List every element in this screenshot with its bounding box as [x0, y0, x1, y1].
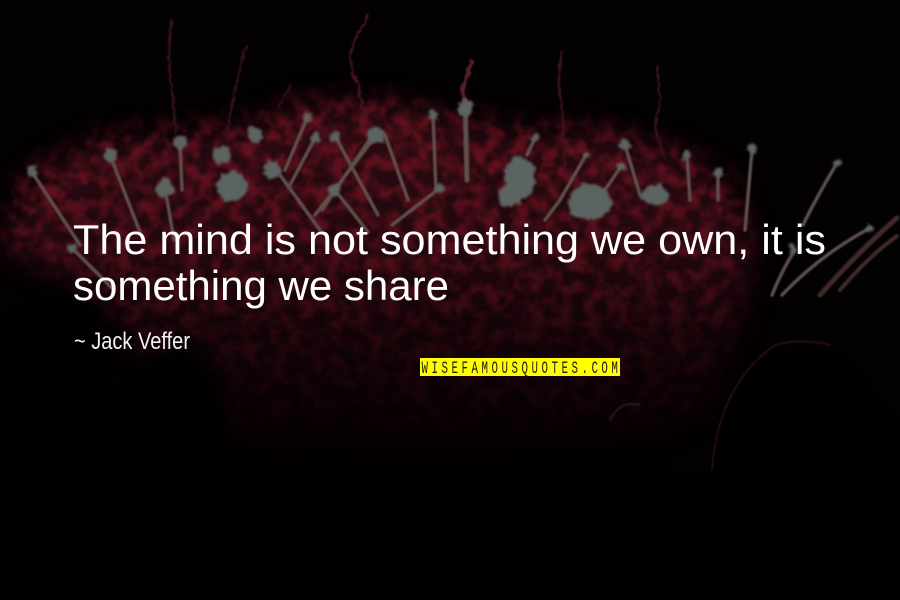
watermark badge: WISEFAMOUSQUOTES.COM	[422, 360, 621, 379]
quote line 1: The mind is not something we own, it is	[73, 216, 826, 263]
rising red trails	[169, 15, 665, 175]
silhouettes of crowd	[0, 290, 900, 600]
firework bursts	[26, 100, 874, 253]
silhouette rim highlights	[610, 342, 830, 470]
firework streaks	[32, 100, 897, 295]
author attribution: ~ Jack Veffer	[74, 328, 190, 355]
quote line 2: something we share	[73, 262, 449, 309]
red firework glow	[0, 100, 755, 470]
quote text	[73, 216, 826, 309]
